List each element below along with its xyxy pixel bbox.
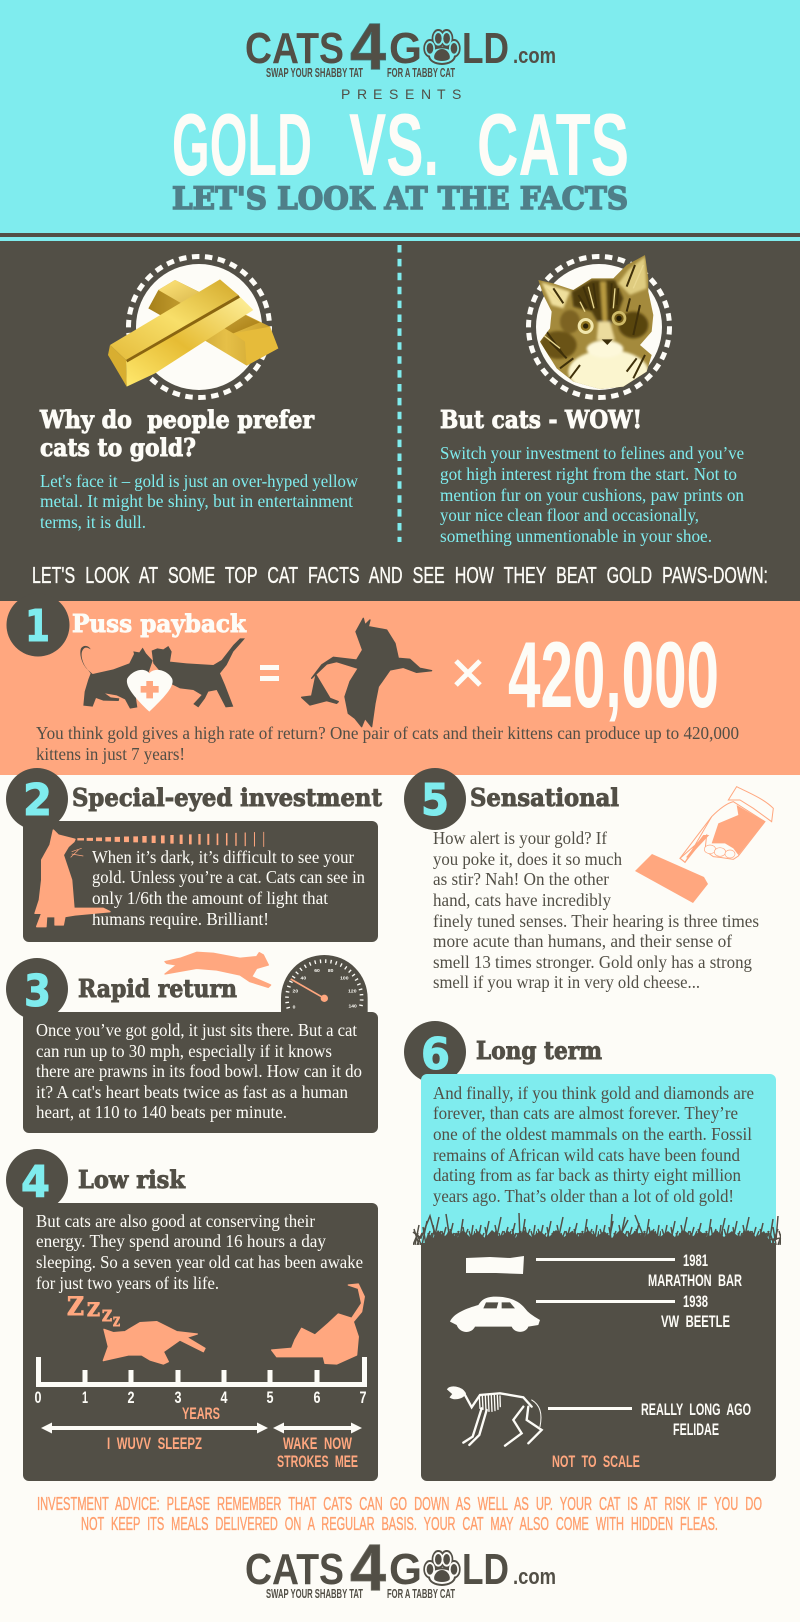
icon: running cat <box>165 952 271 987</box>
heading 5: Sensational <box>470 783 619 812</box>
text 3: can run up to 30 mph, especially if it knows <box>36 1041 332 1061</box>
subtitle: LET'S LOOK AT THE FACTS <box>172 181 628 217</box>
panel 2: special-eyed investment <box>6 768 382 942</box>
text 2: gold. Unless you’re a cat. Cats can see in <box>92 867 365 887</box>
ruler timeline: 2 <box>128 1388 134 1407</box>
ruler timeline: 1 <box>82 1388 88 1407</box>
icon: speedometer: 0 <box>293 1005 296 1011</box>
right intro text <box>440 405 744 546</box>
left intro text: terms, it is dull. <box>40 512 146 532</box>
icon: speedometer: 20 <box>293 989 298 995</box>
text 5: finely tuned senses. Their hearing is three times <box>433 911 759 931</box>
icon: kitten in ring <box>528 255 670 398</box>
icon: speedometer: 120 <box>348 988 357 994</box>
icon: gold bar <box>635 854 708 903</box>
left intro text: cats to gold? <box>40 433 196 462</box>
header background <box>0 0 800 233</box>
line and label: felidae: FELIDAE <box>673 1420 719 1439</box>
icon: stretching cat <box>272 1284 364 1364</box>
line and label: 1938 <box>536 1292 730 1331</box>
number badge 1: 1 <box>25 601 50 652</box>
panel 5: sensational <box>404 768 773 992</box>
text 6: one of the oldest mammals on the earth. Fossil <box>433 1124 752 1144</box>
logo bottom: FOR A TABBY CAT <box>387 1586 455 1601</box>
ruler timeline: 6 <box>314 1388 320 1407</box>
badge 6: 6 <box>421 1029 450 1080</box>
right intro text: got high interest right from the start. Not to <box>440 464 737 484</box>
line and label: 1938: 1938 <box>683 1292 708 1311</box>
sleep letters <box>67 1292 120 1329</box>
text 5 <box>433 828 759 992</box>
logo top: .com <box>513 43 556 68</box>
text 2 <box>92 847 365 929</box>
text 5: How alert is your gold? If <box>433 828 607 848</box>
icon: speedometer: 60 <box>314 968 320 974</box>
panel 6: long term <box>404 1021 781 1481</box>
icon: cats and heart <box>80 638 245 712</box>
logo top: LD <box>462 24 509 73</box>
text 6: remains of African wild cats have been found <box>433 1145 740 1165</box>
text 3: Once you’ve got gold, it just sits there. But a cat <box>36 1020 357 1040</box>
main title <box>172 95 629 194</box>
presents: PRESENTS <box>341 86 461 102</box>
badge 2 <box>6 768 68 830</box>
icon: gold bars in ring <box>108 256 278 398</box>
text 4: for just two years of its life. <box>36 1273 219 1293</box>
panel 3: rapid return <box>6 952 378 1133</box>
logo bottom: SWAP YOUR SHABBY TAT <box>266 1586 363 1601</box>
dark panel background <box>0 233 800 601</box>
heading 3: Rapid return <box>78 974 237 1003</box>
heading 6: Long term <box>476 1036 602 1065</box>
right intro text: something unmentionable in your shoe. <box>440 526 712 546</box>
ruler timeline <box>34 1357 367 1407</box>
text 1: You think gold gives a high rate of return? One pair of cats and their kittens can produce up to 420,000 <box>36 723 739 743</box>
text 4: energy. They spend around 16 hours a day <box>36 1231 326 1251</box>
icon: speedometer: 40 <box>301 975 306 981</box>
stripe <box>0 237 800 241</box>
heading 2: Special-eyed investment <box>72 783 382 812</box>
logo top: 4 <box>350 9 386 83</box>
badge 5 <box>404 768 466 830</box>
investment advice disclaimer <box>37 1494 762 1534</box>
text 5: smell 13 times stronger. Gold only has a strong <box>433 952 752 972</box>
heading 4: Low risk <box>78 1165 186 1194</box>
text 3: heart, at 110 to 140 beats per minute. <box>36 1102 287 1122</box>
icon: pointing hand <box>680 787 773 862</box>
number badge 1 <box>6 594 70 656</box>
left intro text: metal. It might be shiny, but in entertainment <box>40 491 353 511</box>
badge 6 <box>404 1021 466 1083</box>
timeline labels: I WUVV SLEEPZ <box>107 1435 202 1453</box>
ruler timeline: 0 <box>34 1388 42 1407</box>
left intro text: Let's face it – gold is just an over-hyped yellow <box>40 471 358 491</box>
text 6: forever, than cats are almost forever. They’re <box>433 1103 738 1123</box>
ruler timeline: 7 <box>360 1388 366 1407</box>
logo bottom: G <box>389 1545 422 1594</box>
text 2: When it’s dark, it’s difficult to see your <box>92 847 354 867</box>
card 4 <box>23 1203 378 1481</box>
multiply sign <box>456 661 480 685</box>
text 6: years ago. That’s older than a lot of old gold! <box>433 1186 734 1206</box>
ruler timeline: 5 <box>266 1388 274 1407</box>
text 4: But cats are also good at conserving their <box>36 1211 315 1231</box>
logo top: FOR A TABBY CAT <box>387 65 455 80</box>
badge 3: 3 <box>24 966 51 1017</box>
icon: sleeping cat <box>103 1322 205 1364</box>
right intro text: But cats - WOW! <box>440 405 642 434</box>
logo top: CATS <box>245 24 344 73</box>
icon: speedometer: 80 <box>328 968 334 974</box>
badge 2: 2 <box>23 775 52 826</box>
line and label: 1938: VW BEETLE <box>661 1312 730 1331</box>
text 4: sleeping. So a seven year old cat has been awake <box>36 1252 363 1272</box>
text 5: smell if you wrap it in very old cheese... <box>433 972 700 992</box>
arrow awake years <box>273 1422 362 1434</box>
sleep letters: Z <box>113 1315 120 1329</box>
card 2 <box>23 821 378 942</box>
arrow sleeping years <box>41 1422 268 1434</box>
text 3: there are prawns in its food bowl. How can it do <box>36 1061 362 1081</box>
text 5: you poke it, does it so much <box>433 849 622 869</box>
years label: YEARS <box>182 1405 220 1423</box>
text 2: only 1/6th the amount of light that <box>92 888 328 908</box>
ruler timeline: 4 <box>220 1388 228 1407</box>
line and label: 1981: 1981 <box>683 1251 708 1270</box>
panel 4: low risk <box>6 1149 378 1481</box>
text 3: it? A cat's heart beats twice as fast as a human <box>36 1082 348 1102</box>
icon: speedometer: 140 <box>348 1003 357 1009</box>
logo bottom <box>245 1530 556 1604</box>
text 5: more acute than humans, and their sense of <box>433 931 732 951</box>
logo bottom: LD <box>462 1545 509 1594</box>
line and label: felidae <box>548 1400 751 1439</box>
sleep letters: Z <box>67 1292 84 1321</box>
main title: CATS <box>477 95 629 194</box>
right intro text: your nice clean floor and occasionally, <box>440 505 699 525</box>
text 6: dating from as far back as thirty eight million <box>433 1165 741 1185</box>
badge 3 <box>6 958 68 1020</box>
text 6: And finally, if you think gold and diamonds are <box>433 1083 754 1103</box>
main title: GOLD <box>172 95 312 194</box>
icon: VW beetle <box>450 1297 540 1332</box>
icon: sitting cat with eye beam <box>35 830 264 927</box>
text 2: humans require. Brilliant! <box>92 909 269 929</box>
center dashed divider <box>398 245 402 542</box>
badge 4 <box>6 1149 68 1211</box>
logo bottom: .com <box>513 1564 556 1589</box>
card 3 <box>23 1012 378 1133</box>
text 6 <box>433 1083 754 1206</box>
timeline labels: WAKE NOW <box>283 1435 352 1453</box>
timeline labels: STROKES MEE <box>277 1453 358 1471</box>
heading 1: Puss payback <box>72 609 247 638</box>
panel 1: puss payback <box>0 594 800 775</box>
text 4 <box>36 1211 363 1293</box>
icon: stork with bundle <box>302 618 432 727</box>
text 3 <box>36 1020 362 1122</box>
ground panel <box>421 1243 776 1481</box>
sleep letters: Z <box>102 1307 112 1325</box>
sky panel <box>421 1074 776 1250</box>
logo bottom: 4 <box>350 1530 386 1604</box>
badge 4: 4 <box>21 1157 50 1208</box>
left intro text <box>39 405 358 532</box>
grass <box>413 1213 781 1245</box>
text 5: hand, cats have incredibly <box>433 890 611 910</box>
text 5: as stir? Nah! On the other <box>433 869 609 889</box>
logo top: SWAP YOUR SHABBY TAT <box>266 65 363 80</box>
not to scale: NOT TO SCALE <box>552 1452 640 1471</box>
left intro text: Why do people prefer <box>39 405 314 434</box>
icon: cat skeleton <box>447 1387 542 1446</box>
text 1: kittens in just 7 years! <box>36 744 185 764</box>
icon: speedometer: 100 <box>340 975 349 981</box>
logo top <box>245 9 556 83</box>
line and label: 1981: MARATHON BAR <box>648 1271 742 1290</box>
badge 5: 5 <box>421 775 449 826</box>
sleep letters: Z <box>87 1299 100 1321</box>
timeline labels <box>107 1435 358 1471</box>
main title: VS. <box>349 95 439 194</box>
right intro text: mention fur on your cushions, paw prints on <box>440 485 744 505</box>
right intro text: Switch your investment to felines and you’ve <box>440 443 744 463</box>
icon: candy bar <box>466 1256 524 1274</box>
equals sign <box>260 665 279 681</box>
line and label: 1981 <box>536 1251 742 1290</box>
icon: speedometer <box>281 955 368 1013</box>
logo top: G <box>389 24 422 73</box>
logo bottom: CATS <box>245 1545 344 1594</box>
ruler timeline: 3 <box>174 1388 182 1407</box>
text 1 <box>36 723 739 764</box>
